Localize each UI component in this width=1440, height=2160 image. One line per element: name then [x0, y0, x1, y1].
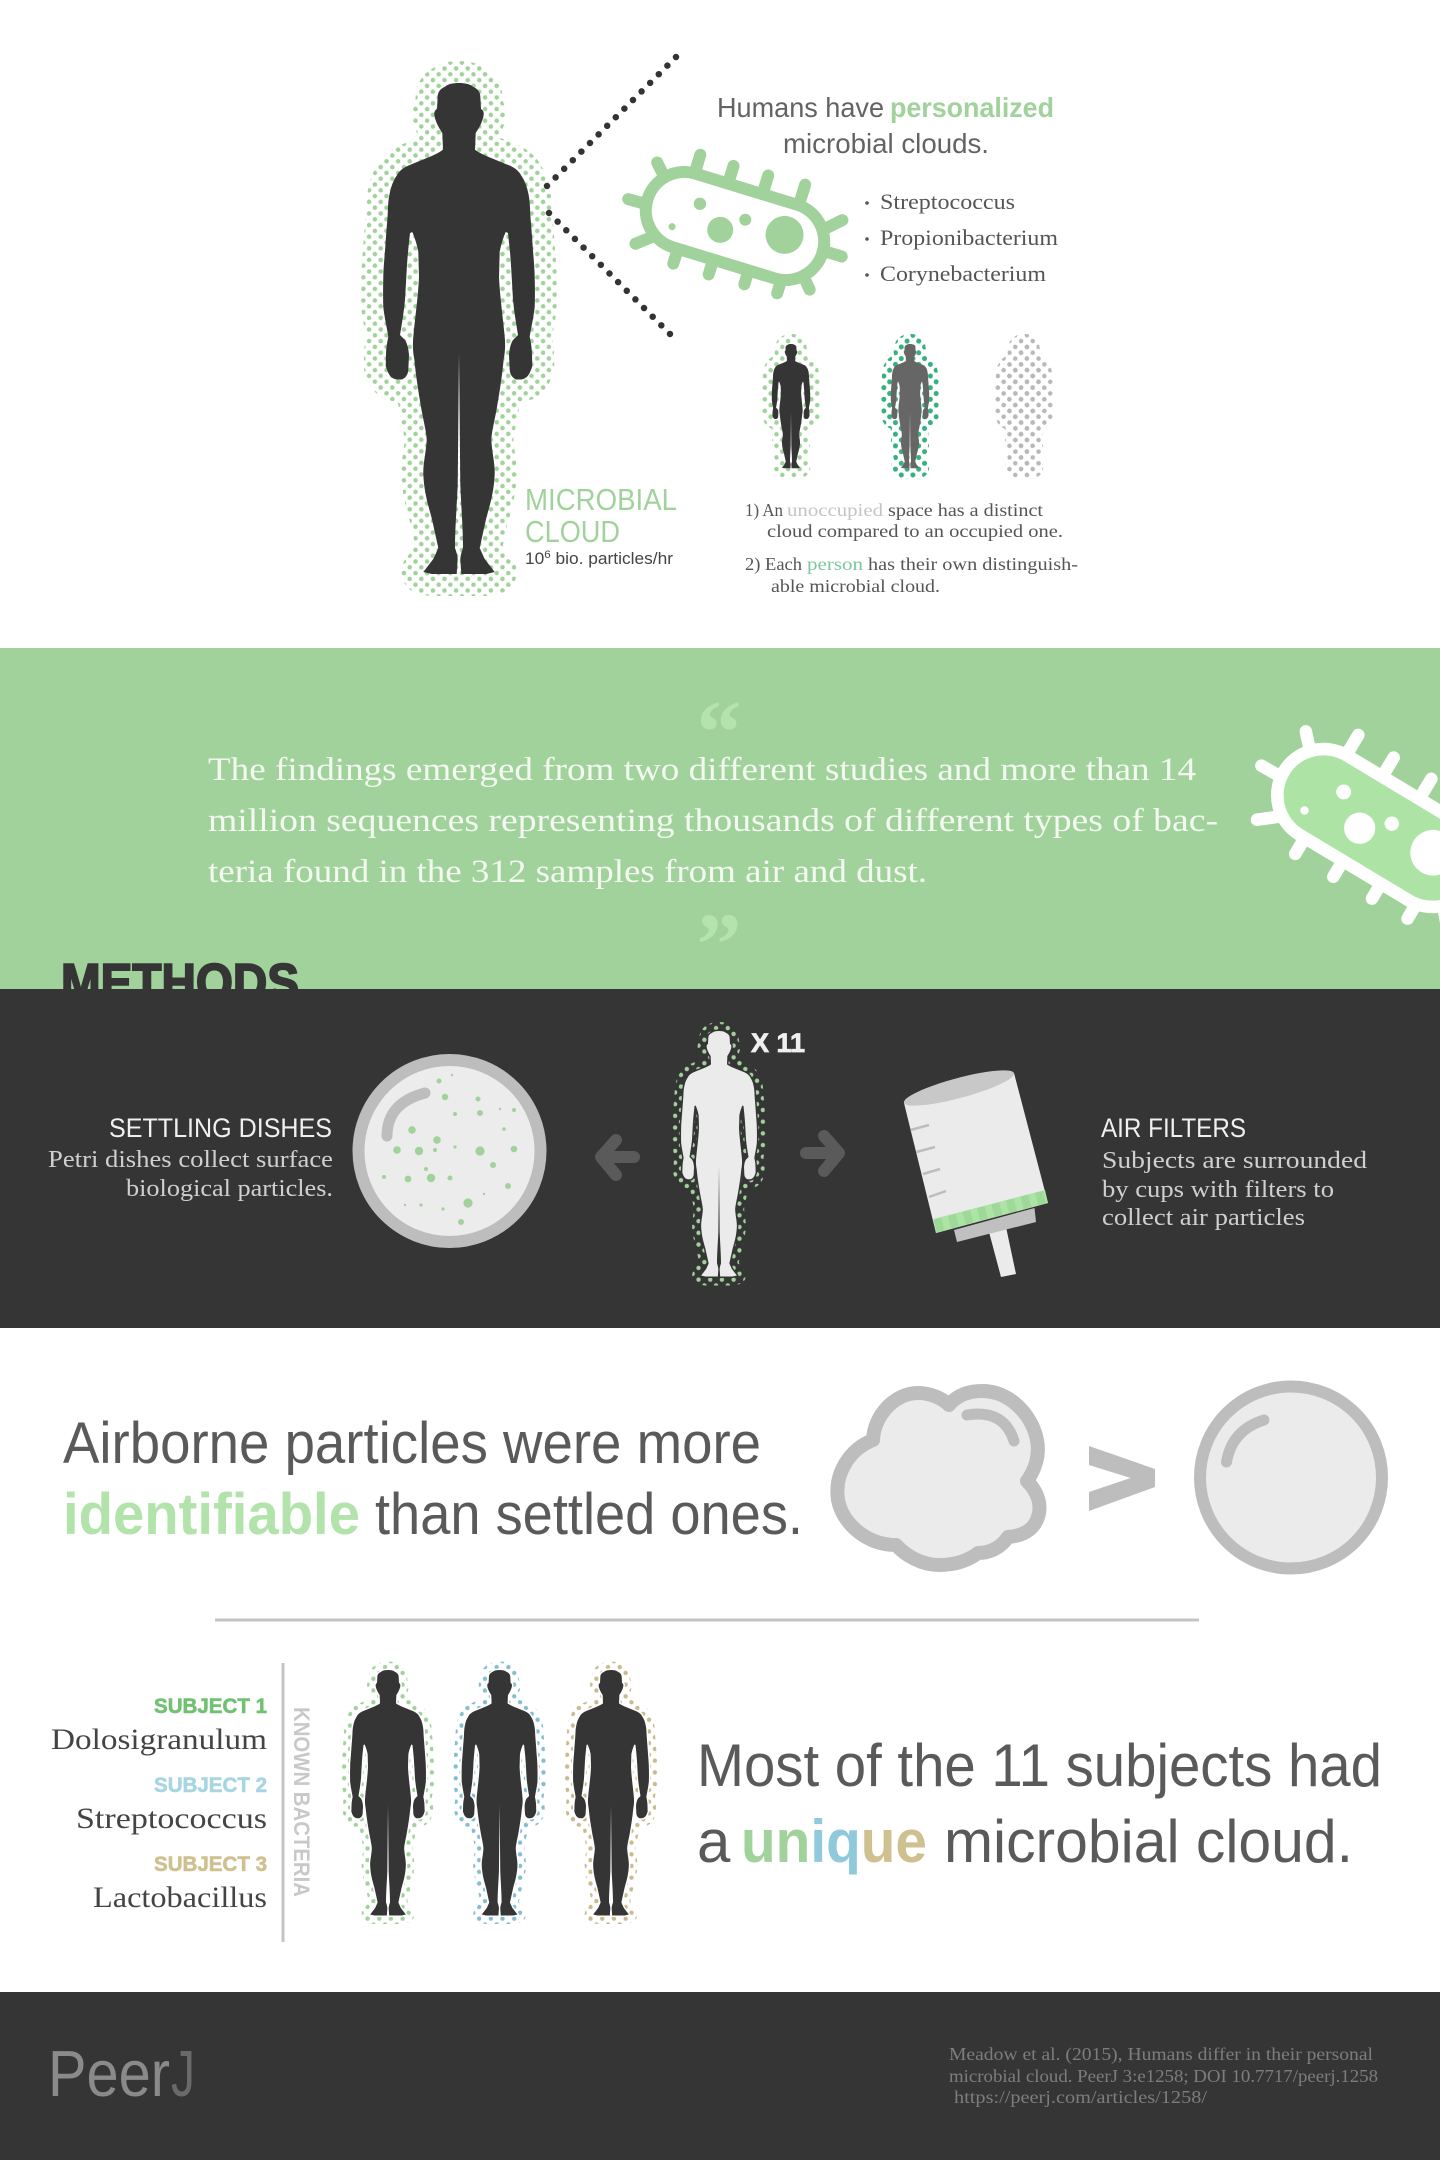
air filters text: Subjects are surrounded: [1102, 1148, 1367, 1174]
quote text: teria found in the 312 samples from air and dust.: [208, 854, 927, 890]
list: common bacteria: Streptococcus: [880, 189, 1015, 214]
citation: https://peerj.com/articles/1258/: [954, 2087, 1207, 2107]
statement: airborne particles more identifiable: [63, 1411, 803, 1547]
small figure: unoccupied space cloud: [1005, 344, 1043, 468]
subject list: [51, 1695, 267, 1914]
logo: PeerJ: Peer: [48, 2037, 170, 2110]
arrow: left to dishes: [601, 1140, 634, 1175]
quote text: million sequences representing thousands of different types of bac-: [208, 803, 1218, 839]
particles per hour label: 10: [525, 550, 543, 568]
panel: methods: [0, 989, 1440, 1328]
quote text: The findings emerged from two different studies and more than 14: [208, 752, 1196, 788]
particles per hour label: 6: [544, 549, 551, 561]
dotted zoom lines: [547, 57, 676, 334]
statement: unique microbial cloud: [697, 1732, 1382, 1875]
small figure: distinct person: [891, 344, 929, 468]
notes on occupied space and persons: space has a distinct: [888, 500, 1043, 520]
subject 2 figure: [462, 1670, 538, 1916]
air filters text: [1101, 1113, 1367, 1231]
notes on occupied space and persons: person: [807, 554, 863, 574]
panel: quote band: [0, 648, 1440, 1012]
subject list: SUBJECT 1: [154, 1695, 267, 1718]
list: common bacteria: Corynebacterium: [880, 261, 1046, 286]
notes on occupied space and persons: 1) An: [745, 500, 783, 521]
citation: [949, 2044, 1378, 2107]
citation: Meadow et al. (2015), Humans differ in their personal: [949, 2044, 1373, 2065]
arrow: right to filters: [806, 1136, 839, 1171]
heading: methods: METHODS: [61, 954, 299, 1012]
heading: humans have personalized microbial clouds: Humans have: [717, 92, 884, 123]
statement: unique microbial cloud: a: [697, 1808, 731, 1875]
subject 1 figure: [350, 1670, 426, 1916]
subject 3 figure: [573, 1670, 649, 1916]
microbial cloud label: [525, 482, 677, 549]
human figure with microbial cloud: [383, 83, 535, 574]
notes on occupied space and persons: [745, 500, 1078, 596]
icon: green bacterium: [614, 136, 859, 310]
opening quote mark: “: [696, 683, 742, 782]
closing quote mark: ”: [696, 896, 742, 995]
notes on occupied space and persons: cloud compared to an occupied one.: [767, 521, 1063, 541]
heading: humans have personalized microbial clouds: microbial clouds.: [783, 128, 989, 159]
notes on occupied space and persons: has their own distinguish-: [868, 554, 1078, 574]
air filters text: AIR FILTERS: [1101, 1113, 1246, 1143]
light human figure with dotted cloud: [681, 1031, 757, 1276]
particles per hour label: bio. particles/hr: [551, 550, 674, 568]
statement: airborne particles more identifiable: Airborne particles were more: [63, 1411, 761, 1476]
known bacteria vertical label: KNOWN BACTERIA: [289, 1707, 314, 1897]
subject list: Streptococcus: [76, 1802, 267, 1835]
air filters text: by cups with filters to: [1102, 1177, 1334, 1203]
small figure: occupied space: [772, 344, 810, 468]
heading: humans have personalized microbial clouds: [717, 92, 1054, 159]
subject list: Lactobacillus: [93, 1881, 267, 1914]
list: common bacteria: Propionibacterium: [880, 225, 1058, 250]
settling dishes text: [48, 1113, 333, 1202]
icon: cloud: [837, 1391, 1040, 1565]
list: common bacteria: [865, 189, 1058, 286]
notes on occupied space and persons: unoccupied: [787, 500, 883, 520]
statement: airborne particles more identifiable: identifiable: [63, 1482, 360, 1547]
settling dishes text: biological particles.: [126, 1176, 333, 1202]
heading: humans have personalized microbial clouds: personalized: [890, 92, 1054, 123]
microbial cloud label: MICROBIAL: [525, 482, 677, 517]
logo: PeerJ: J: [171, 2037, 195, 2110]
times 11 label: X 11: [751, 1028, 805, 1058]
microbial cloud label: CLOUD: [525, 514, 620, 549]
panel: airborne vs settled: [0, 1328, 1440, 1992]
citation: microbial cloud. PeerJ 3:e1258; DOI 10.7717/peerj.1258: [949, 2066, 1378, 2086]
notes on occupied space and persons: able microbial cloud.: [771, 576, 940, 596]
icon: greater-than sign: [1089, 1446, 1155, 1511]
icon: air filter cup: [901, 1064, 1048, 1277]
air filters text: collect air particles: [1102, 1205, 1305, 1231]
statement: airborne particles more identifiable: than settled ones.: [375, 1482, 803, 1547]
subject list: Dolosigranulum: [51, 1723, 267, 1756]
statement: unique microbial cloud: Most of the 11 subjects had: [697, 1732, 1382, 1799]
icon: petri dish: [358, 1060, 540, 1242]
subject list: SUBJECT 3: [154, 1853, 267, 1876]
panel: footer: [0, 1992, 1440, 2160]
icon: white bacterium: [1231, 698, 1440, 952]
icon: round dish: [1200, 1386, 1382, 1568]
settling dishes text: SETTLING DISHES: [109, 1113, 332, 1143]
settling dishes text: Petri dishes collect surface: [48, 1147, 333, 1173]
notes on occupied space and persons: 2) Each: [745, 554, 802, 575]
quote text: [208, 752, 1218, 890]
statement: unique microbial cloud: microbial cloud.: [944, 1808, 1353, 1875]
panel: personalized microbial clouds: [0, 0, 1440, 648]
subject list: SUBJECT 2: [154, 1774, 267, 1797]
statement: unique microbial cloud: unique: [741, 1808, 927, 1875]
